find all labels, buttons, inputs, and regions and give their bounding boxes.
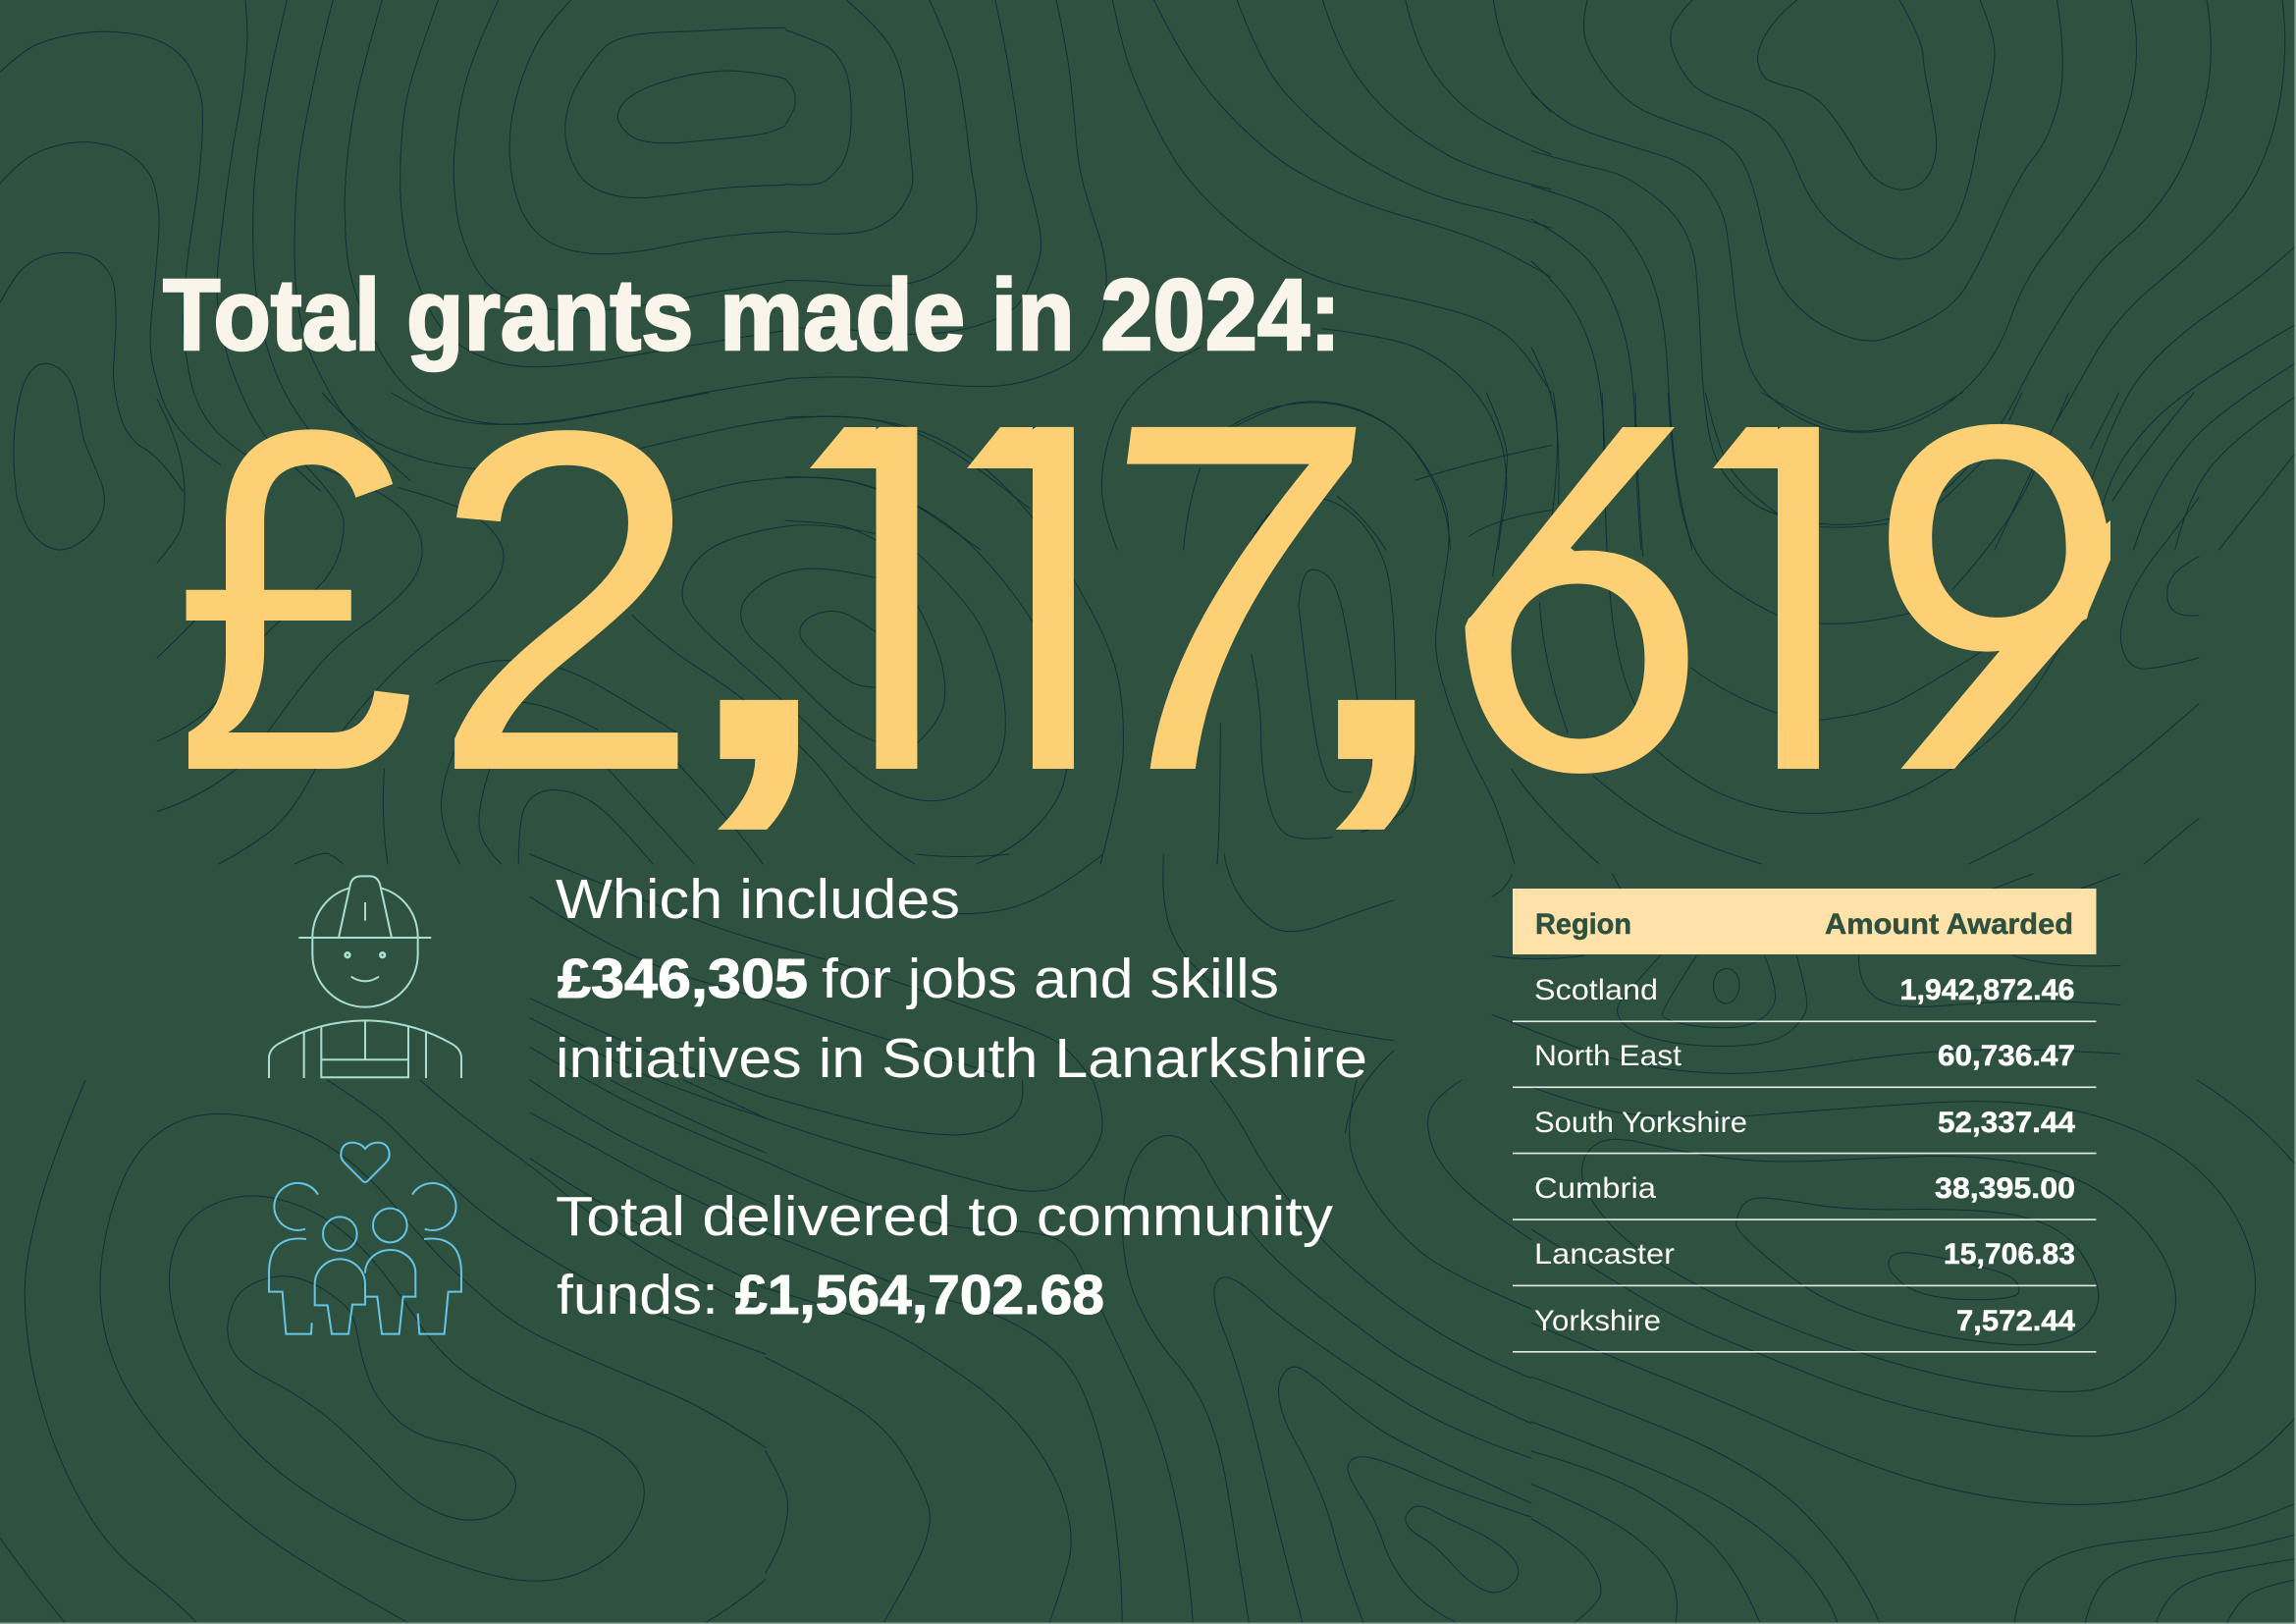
text block: community funds: £1,564,702.68 (735, 1264, 1104, 1326)
headline figure: 6 (1440, 326, 1709, 874)
row: South Yorkshire: South Yorkshire (1534, 1107, 1747, 1139)
row: Lancaster: 15,706.83 (1944, 1238, 2075, 1271)
table header: Region (1535, 908, 1631, 941)
headline figure: , (644, 259, 872, 876)
text block: jobs and skills: Which includes (556, 868, 960, 931)
text block: jobs and skills: £346,305 (558, 947, 808, 1010)
row: North East: 60,736.47 (1938, 1040, 2075, 1072)
row: Lancaster: Lancaster (1534, 1238, 1675, 1271)
title: Total grants made in 2024: (163, 258, 1341, 371)
headline figure: £ (174, 329, 416, 872)
headline figure: 2 (430, 331, 703, 872)
headline figure: 1 (915, 319, 1175, 874)
row: North East: North East (1534, 1040, 1682, 1072)
icon: construction worker (269, 876, 461, 1078)
table: amount awarded by region (1513, 889, 2097, 1353)
row: Yorkshire (1513, 1305, 2097, 1353)
headline figure: , (1263, 260, 1487, 876)
row: South Yorkshire (1513, 1107, 2097, 1154)
headline figure (187, 424, 2110, 830)
row: Cumbria (1513, 1172, 2097, 1220)
row: South Yorkshire: 52,337.44 (1938, 1107, 2075, 1139)
table header (1513, 889, 2097, 954)
text block: community funds: Total delivered to community (556, 1185, 1334, 1248)
row: Lancaster (1513, 1238, 2097, 1286)
row: Scotland: Scotland (1534, 974, 1658, 1006)
icon: family with heart (269, 1143, 461, 1334)
headline figure: 9 (1866, 324, 2135, 872)
row: Yorkshire: 7,572.44 (1956, 1305, 2075, 1337)
text block: jobs and skills: initiatives in South Lanarkshire (556, 1027, 1367, 1090)
row: Scotland (1513, 974, 2097, 1022)
row: Yorkshire: Yorkshire (1534, 1305, 1661, 1337)
text block: community funds (556, 1185, 1334, 1326)
headline figure: 1 (1661, 319, 1920, 874)
headline figure: 7 (1048, 320, 1395, 875)
text block: jobs and skills (556, 868, 1367, 1090)
text block: jobs and skills: for jobs and skills (822, 947, 1279, 1010)
row: North East (1513, 1040, 2097, 1088)
row: Cumbria: 38,395.00 (1935, 1172, 2075, 1205)
table header: Amount Awarded (1825, 908, 2073, 941)
text block: community funds: funds: (557, 1264, 719, 1326)
row: Cumbria: Cumbria (1534, 1172, 1656, 1205)
headline figure: 1 (759, 319, 1018, 874)
row: Scotland: 1,942,872.46 (1900, 974, 2075, 1006)
